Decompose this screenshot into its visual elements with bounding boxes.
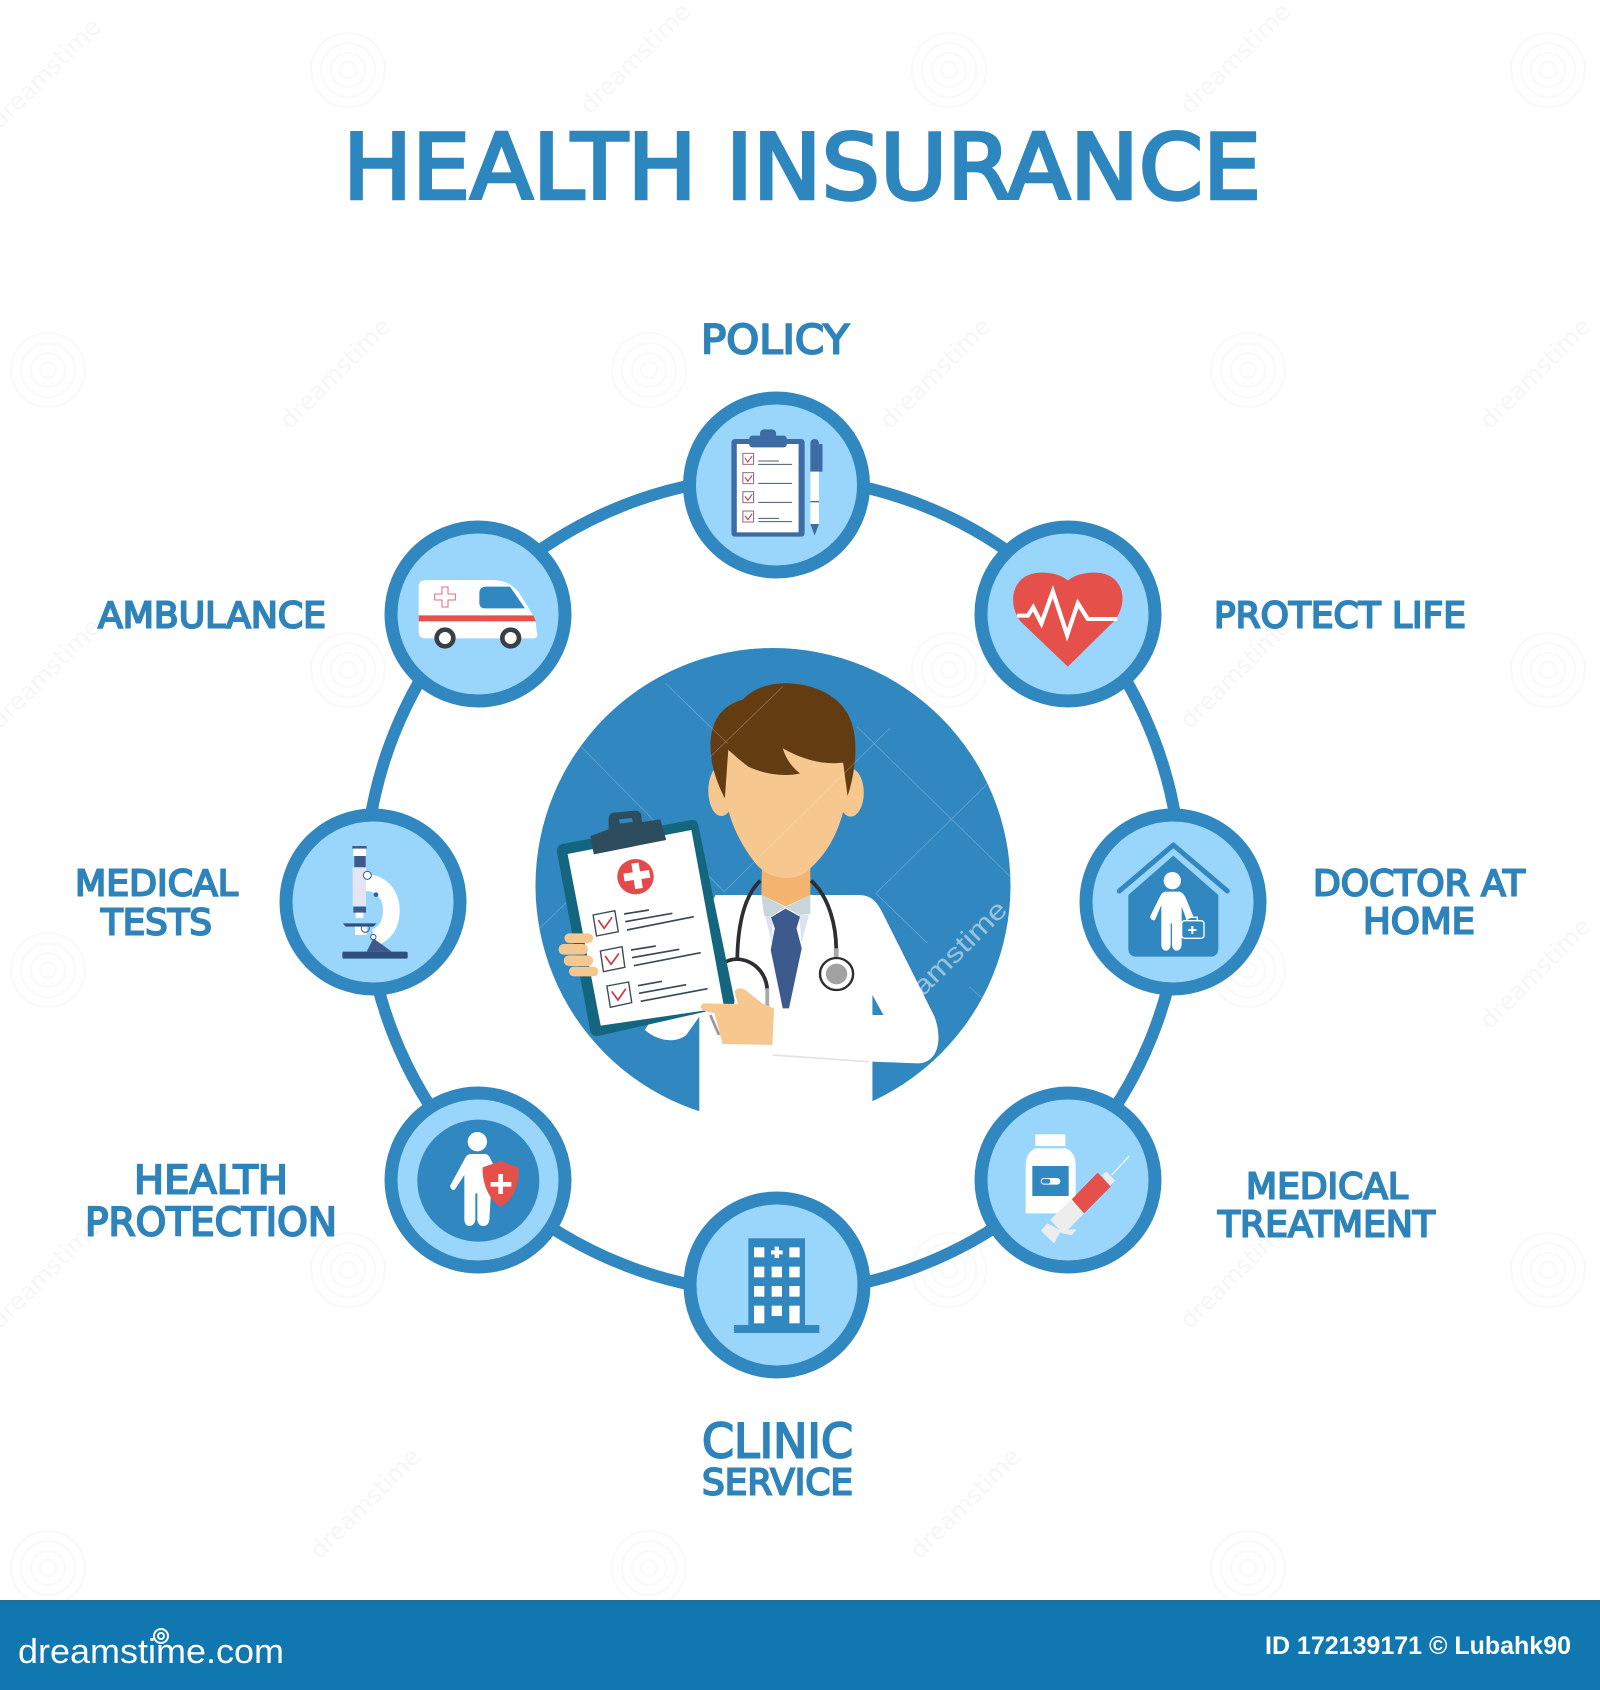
- title: HEALTH INSURANCE: [343, 116, 1261, 220]
- doctor coat: [645, 895, 938, 1140]
- label: medical tests: MEDICAL: [75, 864, 238, 904]
- label: medical tests: [75, 864, 238, 944]
- label: protect life: PROTECT LIFE: [1214, 596, 1466, 636]
- text: dreamstime: [304, 1443, 426, 1564]
- label: medical treatment: [1217, 1166, 1436, 1246]
- clipboard: [557, 811, 735, 1036]
- label: clinic service: [702, 1414, 853, 1504]
- label: medical treatment: TREATMENT: [1217, 1204, 1436, 1246]
- connecting ring: [365, 477, 1181, 1293]
- text: dreamstime: [574, 0, 696, 119]
- label: health protection: [85, 1158, 337, 1246]
- text: dreamstime: [1474, 313, 1596, 434]
- label: clinic service: CLINIC: [702, 1414, 853, 1470]
- node: clinic service: [690, 1198, 864, 1372]
- central doctor illustration: [536, 648, 1013, 1140]
- blue backdrop circle: [536, 648, 1010, 1123]
- text: dreamstime: [874, 313, 996, 434]
- icon: hospital building: [734, 1238, 819, 1333]
- label: medical tests: TESTS: [100, 902, 212, 944]
- label: health protection: HEALTH: [134, 1158, 288, 1204]
- watermark lines: [540, 683, 1010, 998]
- shirt and collar: [765, 915, 809, 945]
- footer logo spiral: [154, 1629, 168, 1643]
- label: ambulance: AMBULANCE: [98, 596, 326, 636]
- label: medical treatment: MEDICAL: [1246, 1166, 1408, 1208]
- label: health protection: PROTECTION: [85, 1200, 337, 1246]
- hair: [711, 683, 855, 798]
- icon: heart with pulse: [1013, 573, 1123, 667]
- icon: bottle and syringe: [1026, 1134, 1129, 1243]
- text: dreamstime: [1474, 913, 1596, 1034]
- footer logo text: dreamstime.com: [18, 1633, 284, 1671]
- icon: clipboard and pen: [731, 429, 822, 537]
- node: medical treatment: [981, 1093, 1155, 1267]
- node: medical tests: [286, 815, 460, 989]
- stethoscope: [737, 881, 836, 958]
- text: dreamstime: [274, 313, 396, 434]
- text: dreamstime: [1174, 613, 1296, 734]
- ears: [708, 765, 734, 816]
- footer image credit: ID 172139171 © Lubahk90: [1265, 1632, 1571, 1660]
- footer bar: [0, 1600, 1600, 1690]
- node: ambulance: [391, 527, 565, 701]
- node: policy: [690, 398, 864, 572]
- label: doctor at home: [1313, 864, 1526, 942]
- node: doctor at home: [1086, 815, 1260, 989]
- right hand holding pen: [701, 988, 774, 1045]
- text: dreamstime: [904, 1443, 1026, 1564]
- neck: [761, 860, 810, 907]
- watermark text on circle: dreamstime: [873, 894, 1013, 1034]
- text: dreamstime: [1174, 0, 1296, 119]
- label: policy: POLICY: [701, 318, 850, 364]
- icon: house with doctor: [1119, 845, 1227, 957]
- label: doctor at home: DOCTOR AT: [1313, 864, 1526, 904]
- tie: [771, 909, 802, 1008]
- label: clinic service: SERVICE: [702, 1462, 853, 1504]
- icon: person with shield: [417, 1120, 539, 1242]
- left hand fingers: [559, 933, 598, 976]
- text: dreamstime: [1174, 1213, 1296, 1334]
- icon: microscope: [342, 846, 408, 959]
- node: protect life: [981, 527, 1155, 701]
- node: health protection: [391, 1093, 565, 1267]
- face: [725, 743, 847, 878]
- label: doctor at home: HOME: [1363, 902, 1475, 942]
- icon: ambulance van: [419, 580, 537, 646]
